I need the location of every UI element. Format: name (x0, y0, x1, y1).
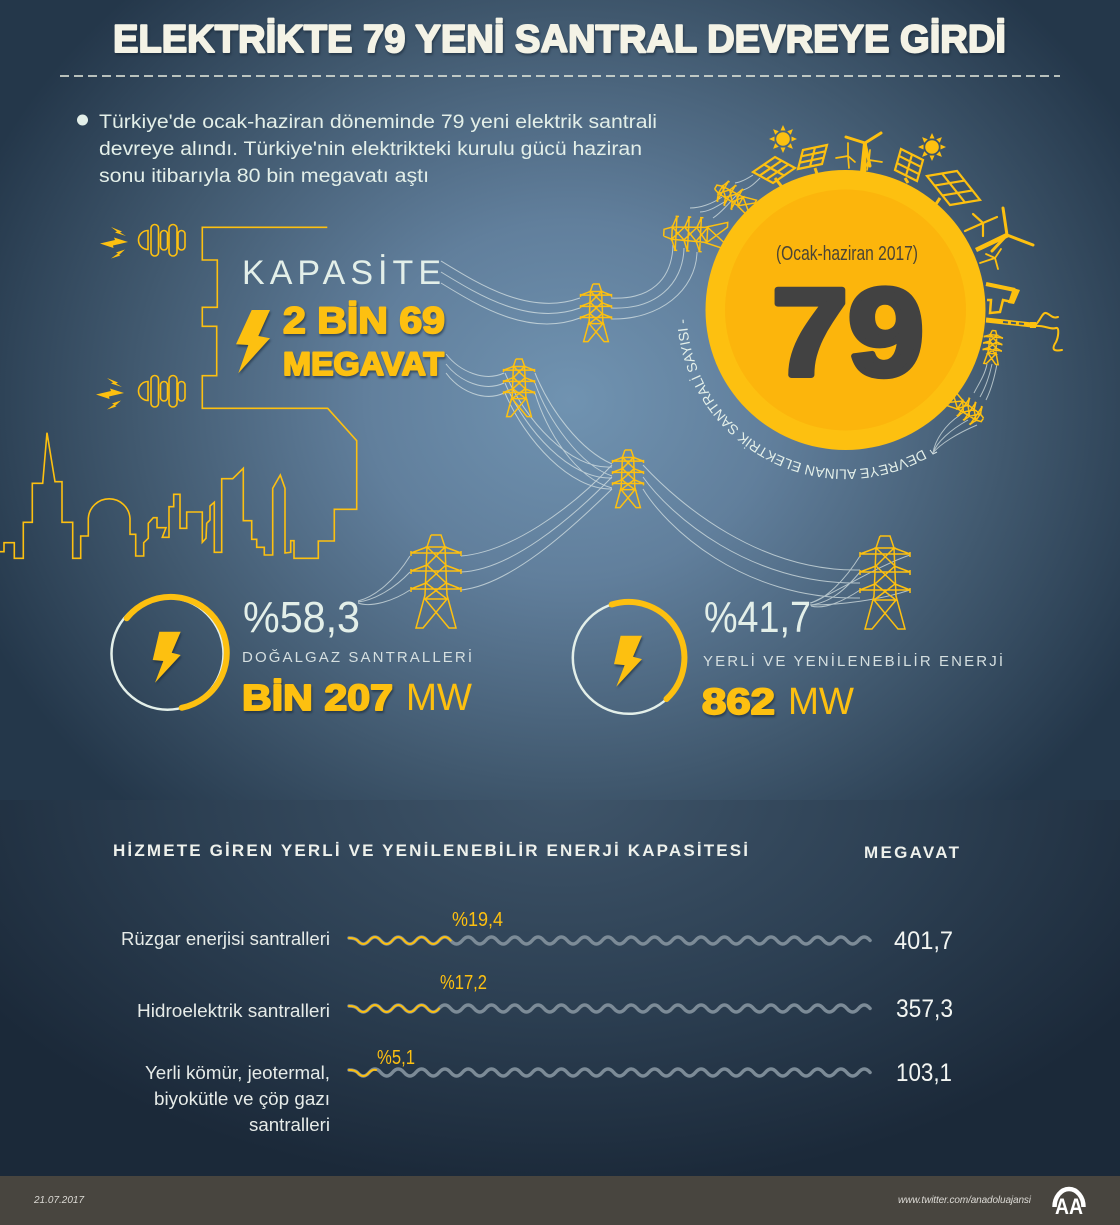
power lines (358, 175, 997, 607)
section heading: HİZMETE GİREN YERLİ VE YENİLENEBİLİR ENERJİ KAPASİTESİ (113, 841, 748, 860)
label: DOĞALGAZ SANTRALLERİ (242, 648, 472, 666)
value: 103,1 (896, 1059, 952, 1087)
label: YERLİ VE YENİLENEBİLİR ENERJİ (703, 652, 1003, 670)
wave bar (349, 1069, 870, 1076)
wave bar (349, 937, 870, 944)
arrowhead on wires (930, 450, 937, 454)
footer link: www.twitter.com/anadoluajansi (898, 1195, 1032, 1206)
icon: crane (986, 284, 1062, 351)
curved caption: DEVREYE ALINAN ELEKTRİK SANTRALİ SAYISI - (678, 320, 926, 480)
row: wind (121, 909, 953, 955)
big number: 79 (772, 264, 924, 402)
row label: Yerli kömür, jeotermal, (145, 1063, 330, 1083)
footer date: 21.07.2017 (33, 1195, 84, 1206)
city outline and power cable (0, 227, 357, 558)
icon: solar panels (753, 145, 980, 205)
icon: lower insulator with sparks (96, 376, 185, 410)
icon: lightning bolt (614, 636, 642, 687)
capacity block (236, 254, 445, 382)
gauge ring (112, 597, 227, 710)
circle: inner disc (725, 190, 966, 430)
capacity value: 2 BİN 69 (283, 300, 445, 341)
icon: lightning bolt (153, 632, 181, 683)
gauge: domestic and renewable (573, 593, 1003, 723)
row label: Hidroelektrik santralleri (137, 1001, 330, 1021)
icon: suns (769, 125, 946, 161)
big circle with energy illustrations (662, 125, 1063, 480)
value: 862 (702, 681, 775, 722)
circle: outer ring (706, 170, 986, 450)
wave bar (349, 1005, 870, 1012)
row label: Rüzgar enerjisi santralleri (121, 929, 330, 949)
percentage: %58,3 (243, 593, 360, 642)
value: 401,7 (894, 927, 953, 955)
pylons (411, 284, 910, 629)
share: %17,2 (440, 972, 487, 994)
background: upper panel (0, 0, 1120, 800)
icon: lightning bolt (236, 310, 270, 373)
icon: pylons on circle (663, 177, 1003, 429)
gauge ring (573, 602, 685, 714)
background: lower panel (0, 800, 1120, 1176)
title: ELEKTRİKTE 79 YENİ SANTRAL DEVREYE GİRDİ (113, 18, 1006, 61)
row label (145, 1063, 330, 1135)
capacity label: KAPASİTE (242, 254, 441, 292)
value: 357,3 (896, 995, 953, 1023)
share: %19,4 (452, 909, 503, 931)
unit: MW (406, 677, 472, 719)
intro text with bullet (77, 112, 657, 187)
row: hydro (137, 972, 953, 1023)
circle date: (Ocak-haziran 2017) (776, 243, 918, 265)
logo: Anadolu Agency: AA (1055, 1194, 1083, 1219)
capacity unit: MEGAVAT (283, 346, 444, 382)
unit: MW (788, 681, 854, 723)
icon: wind turbines (836, 133, 1033, 269)
intro text with bullet: devreye alındı. Türkiye'nin elektrikteki kurulu gücü haziran (99, 139, 642, 160)
icon: upper insulator with sparks (100, 224, 185, 258)
intro text with bullet: Türkiye'de ocak-haziran döneminde 79 yeni elektrik santrali (99, 112, 657, 133)
row: coal, geothermal, biomass (145, 1047, 952, 1135)
value: BİN 207 (242, 677, 393, 718)
intro text with bullet: sonu itibarıyla 80 bin megavatı aştı (99, 166, 429, 187)
row label: santralleri (249, 1115, 330, 1135)
percentage: %41,7 (704, 593, 811, 642)
row label: biyokütle ve çöp gazı (154, 1089, 330, 1109)
column heading: MEGAVAT (864, 843, 960, 862)
share: %5,1 (377, 1047, 415, 1069)
footer bar (0, 1176, 1120, 1225)
gauge: natural gas (112, 593, 472, 719)
